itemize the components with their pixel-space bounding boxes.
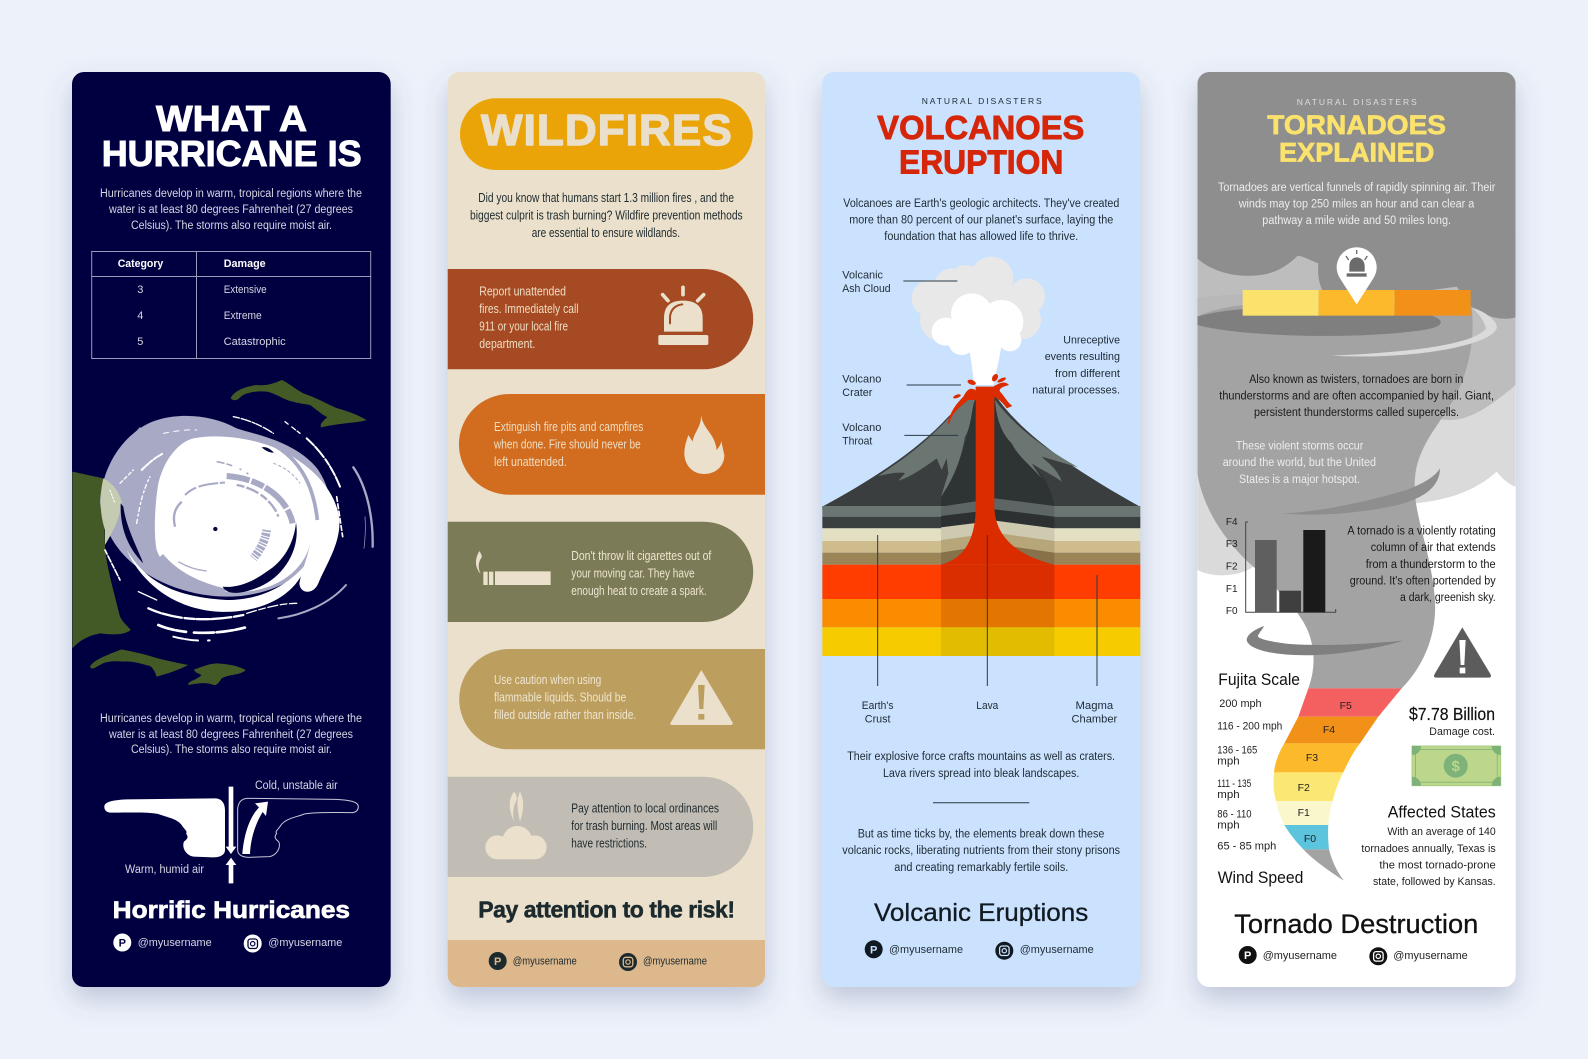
- text block: hurricane note: Celsius). The storms also require moist air.: [131, 744, 332, 756]
- funnel labels: F0: [1304, 833, 1316, 845]
- funnel labels: F1: [1298, 807, 1310, 819]
- social handles: @myusername: [138, 937, 212, 949]
- text block: hurricane intro: [100, 188, 362, 232]
- heading: affected states: Affected States: [1388, 804, 1496, 822]
- text block: tornado intro: winds may top 250 miles an hour and can clear a: [1238, 198, 1475, 210]
- wind speed labels: 111 - 135: [1217, 778, 1251, 790]
- cloud mass: [100, 416, 331, 597]
- icon: banknote: $: [1452, 758, 1461, 775]
- severity bar with alarm pin: [1243, 247, 1471, 316]
- bar chart: F scale: F3: [1226, 539, 1238, 550]
- illustration: storm clouds and funnel: [1197, 70, 1516, 688]
- footer band with social handles: @myusername: [513, 956, 577, 968]
- band: report fires: Report unattended: [479, 284, 566, 298]
- bar chart: F scale: F0: [1226, 606, 1238, 617]
- icon: alarm siren: [658, 287, 708, 345]
- icon: flame: [684, 415, 724, 474]
- hurricane eye: [213, 527, 217, 531]
- volcano labels: Crust: [865, 714, 890, 726]
- volcano labels: Volcano: [842, 374, 881, 386]
- text block: affected states: With an average of 140: [1387, 826, 1496, 838]
- volcano labels: from different: [1055, 368, 1120, 380]
- text block: volcano intro: foundation that has allowed life to thrive.: [884, 231, 1078, 243]
- leader lines: [878, 281, 1097, 686]
- social handles: @myusername: [1263, 950, 1337, 962]
- volcano labels: Volcanic: [842, 270, 883, 282]
- band: report fires: fires. Immediately call: [479, 302, 579, 316]
- text block: fertile soils: [842, 828, 1120, 874]
- text block: volcano intro: Volcanoes are Earth's geologic architects. They've created: [843, 198, 1119, 210]
- volcano labels: Ash Cloud: [842, 283, 891, 295]
- heading: what a hurricane is: [102, 98, 362, 174]
- table: category and damage: Extreme: [224, 310, 262, 322]
- outer streaks: [105, 417, 343, 641]
- white main spiral: [155, 436, 339, 592]
- social handles: P: [119, 938, 126, 950]
- volcano labels: Crater: [842, 387, 873, 399]
- text block: explosive force: [847, 751, 1115, 780]
- volcano labels: [842, 270, 1120, 726]
- wind speed labels: [1217, 698, 1282, 852]
- diagram: warm and cold air fronts: Cold, unstable air: [255, 780, 338, 792]
- icon: map pin: [1337, 247, 1377, 304]
- text block: twisters: thunderstorms and are often accompanied by hail. Giant,: [1219, 390, 1494, 402]
- diagram: warm and cold air fronts: [104, 780, 358, 883]
- text block: affected states: state, followed by Kansas.: [1373, 876, 1496, 888]
- text block: fertile soils: But as time ticks by, the elements break down these: [858, 828, 1104, 840]
- panel: tornadoes: [1197, 70, 1516, 987]
- table: category and damage: 3: [137, 284, 143, 296]
- band: flammable liquids: filled outside rather than inside.: [494, 708, 636, 722]
- text block: fertile soils: volcanic rocks, liberating nutrients from their stony prisons: [842, 845, 1120, 857]
- bar chart: F scale: F2: [1226, 562, 1238, 572]
- social handles: @myusername: [268, 937, 342, 949]
- icon: smoke cloud: [485, 792, 547, 859]
- icon: cigarette: [476, 551, 551, 585]
- eyebrow: natural disasters: NATURAL DISASTERS: [922, 96, 1042, 106]
- table: category and damage: [92, 252, 371, 358]
- funnel labels: [1298, 700, 1352, 845]
- heading: volcanoes eruption: [877, 109, 1084, 180]
- heading: volcanoes eruption: VOLCANOES: [877, 109, 1084, 146]
- heading pill: wildfires: [460, 98, 753, 170]
- table: category and damage: Damage: [224, 258, 266, 270]
- band: cigarettes: [448, 522, 753, 622]
- text block: hurricane note: Hurricanes develop in warm, tropical regions where the: [100, 713, 362, 725]
- text block: twisters: Also known as twisters, tornadoes are born in: [1249, 374, 1463, 386]
- band: trash burning: for trash burning. Most areas will: [571, 819, 717, 833]
- heading: volcanoes eruption: ERUPTION: [899, 144, 1063, 180]
- mountain: [822, 395, 1140, 510]
- footer band with social handles: @myusername: [643, 956, 707, 968]
- volcano labels: Lava: [976, 700, 999, 712]
- social handles: [113, 934, 342, 952]
- diagram: warm and cold air fronts: Warm, humid air: [125, 864, 204, 876]
- illustration: hurricane satellite view: [72, 380, 373, 685]
- heading: wind speed: Wind Speed: [1218, 868, 1303, 887]
- text block: hurricane note: [100, 713, 362, 756]
- wind speed labels: 116 - 200 mph: [1217, 720, 1282, 732]
- footer title: tornado destruction: Tornado Destruction: [1234, 909, 1478, 939]
- text block: tornado intro: pathway a mile wide and 50 miles long.: [1262, 215, 1451, 227]
- bar chart: F scale: [1226, 517, 1336, 617]
- bar chart: F scale: F4: [1226, 517, 1238, 528]
- heading: what a hurricane is: HURRICANE IS: [102, 133, 362, 174]
- band: report fires: [448, 269, 753, 369]
- table: category and damage: Catastrophic: [224, 336, 286, 348]
- wind speed labels: mph: [1217, 756, 1240, 768]
- band: flammable liquids: [459, 649, 765, 749]
- eyebrow: natural disasters: NATURAL DISASTERS: [1297, 97, 1417, 107]
- text block: wildfire intro: are essential to ensure wildlands.: [532, 226, 680, 240]
- heading: fujita scale: Fujita Scale: [1218, 670, 1300, 689]
- wind speed labels: 200 mph: [1219, 698, 1262, 710]
- dark gaps: [121, 503, 143, 563]
- volcano labels: Chamber: [1072, 714, 1118, 726]
- icon: warning triangle: [1434, 627, 1491, 678]
- lava conduit: [941, 373, 1054, 565]
- panel: wildfires: [448, 72, 765, 987]
- text block: twisters: [1219, 374, 1494, 419]
- funnel labels: F4: [1323, 724, 1335, 736]
- stat: damage cost: Damage cost.: [1429, 726, 1495, 738]
- heading pill: wildfires: WILDFIRES: [481, 106, 732, 155]
- wind speed labels: 136 - 165: [1217, 744, 1257, 756]
- text block: explosive force: Lava rivers spread into bleak landscapes.: [883, 768, 1079, 780]
- ash cloud: [912, 257, 1045, 342]
- text block: volcano intro: more than 80 percent of our planet's surface, laying the: [849, 214, 1113, 226]
- footer band with social handles: P: [494, 956, 501, 968]
- text block: volcano intro: [843, 198, 1119, 243]
- social handles: P: [870, 944, 877, 956]
- text block: affected states: tornadoes annually, Texas is: [1361, 843, 1496, 855]
- icon: banknote: [1412, 746, 1501, 786]
- band: extinguish campfires: left unattended.: [494, 455, 567, 469]
- social handles: P: [1244, 950, 1251, 962]
- text block: explosive force: Their explosive force crafts mountains as well as craters.: [847, 751, 1115, 763]
- text block: tornado definition: column of air that extends: [1371, 542, 1496, 554]
- text block: tornado definition: A tornado is a violently rotating: [1347, 526, 1496, 538]
- band: report fires: 911 or your local fire: [479, 320, 568, 334]
- band: extinguish campfires: when done. Fire should never be: [493, 438, 641, 452]
- dark crescent gap: [223, 523, 297, 593]
- icon: alarm: [1346, 250, 1367, 277]
- band: cigarettes: your moving car. They have: [571, 566, 695, 580]
- band: trash burning: have restrictions.: [571, 836, 647, 850]
- social handles: [1239, 946, 1468, 965]
- footer title: horrific hurricanes: Horrific Hurricanes: [113, 897, 350, 924]
- footer band with social handles: [448, 940, 765, 987]
- wind speed labels: mph: [1217, 789, 1240, 801]
- text block: wildfire intro: [470, 191, 743, 240]
- volcano labels: Earth's: [862, 700, 894, 712]
- heading: what a hurricane is: WHAT A: [156, 98, 307, 139]
- band: extinguish campfires: Extinguish fire pits and campfires: [494, 420, 643, 434]
- table: category and damage: Category: [118, 258, 164, 270]
- volcano labels: Throat: [842, 436, 872, 448]
- band: trash burning: Pay attention to local ordinances: [571, 802, 719, 816]
- text block: hurricane note: water is at least 80 degrees Fahrenheit (27 degrees: [108, 729, 353, 741]
- text block: hurricane intro: Hurricanes develop in warm, tropical regions where the: [100, 188, 362, 200]
- volcano labels: Unreceptive: [1063, 334, 1120, 346]
- text block: wildfire intro: Did you know that humans start 1.3 million fires , and the: [478, 191, 734, 205]
- band: trash burning: [448, 777, 753, 877]
- stat: damage cost: $7.78 Billion: [1409, 704, 1495, 724]
- wind speed labels: 65 - 85 mph: [1217, 840, 1276, 852]
- funnel scale and tail: [1247, 626, 1403, 881]
- footer title: volcanic eruptions: Volcanic Eruptions: [874, 899, 1088, 927]
- panel: hurricane: [72, 72, 391, 987]
- eruption column: [932, 293, 1023, 385]
- text block: affected states: [1361, 826, 1496, 888]
- text block: hurricane intro: Celsius). The storms also require moist air.: [131, 220, 332, 232]
- wind speed labels: 86 - 110: [1217, 808, 1252, 820]
- funnel labels: F2: [1298, 782, 1310, 794]
- social handles: @myusername: [1020, 944, 1094, 956]
- funnel labels: F5: [1340, 700, 1352, 712]
- band: flammable liquids: flammable liquids. Should be: [494, 690, 626, 704]
- stat: damage cost: [1409, 704, 1495, 738]
- text block: wildfire intro: biggest culprit is trash burning? Wildfire prevention methods: [470, 208, 743, 222]
- text block: hotspot: [1223, 440, 1376, 486]
- icon: warning triangle: [670, 670, 733, 725]
- heading: tornadoes explained: [1267, 110, 1446, 168]
- illustration: volcano cross-section: [822, 257, 1140, 686]
- text block: hotspot: States is a major hotspot.: [1239, 474, 1360, 486]
- volcano labels: Volcano: [842, 422, 881, 434]
- volcano labels: Magma: [1076, 700, 1114, 712]
- band: cigarettes: Don't throw lit cigarettes out of: [571, 549, 712, 563]
- band: cigarettes: enough heat to create a spark.: [571, 584, 707, 598]
- band: extinguish campfires: [459, 394, 765, 495]
- text block: fertile soils: and creating remarkably fertile soils.: [894, 862, 1068, 874]
- band: report fires: department.: [479, 337, 535, 351]
- white outer band (bottom): [127, 550, 307, 612]
- bar chart: F scale: F1: [1226, 584, 1238, 595]
- strata: [822, 498, 1140, 656]
- table: category and damage: Extensive: [224, 284, 267, 296]
- text block: twisters: persistent thunderstorms called supercells.: [1254, 407, 1459, 419]
- volcano labels: events resulting: [1045, 351, 1120, 363]
- heading: tornadoes explained: EXPLAINED: [1279, 138, 1434, 168]
- text block: tornado definition: from a thunderstorm to the: [1366, 559, 1496, 571]
- land masses: [72, 380, 367, 685]
- text block: hurricane intro: water is at least 80 degrees Fahrenheit (27 degrees: [108, 204, 353, 216]
- text block: tornado definition: [1347, 526, 1496, 604]
- text block: tornado intro: [1218, 182, 1495, 227]
- text block: tornado definition: a dark, greenish sky.: [1400, 592, 1496, 604]
- white streaks on upper cloud: [110, 430, 197, 523]
- social handles: [865, 940, 1094, 960]
- text block: tornado definition: ground. It's often portended by: [1350, 576, 1496, 588]
- social handles: @myusername: [889, 944, 963, 956]
- wind speed labels: mph: [1217, 820, 1240, 832]
- text block: affected states: the most tornado-prone: [1379, 860, 1496, 872]
- social handles: @myusername: [1393, 950, 1468, 962]
- volcano labels: natural processes.: [1032, 384, 1120, 396]
- table: category and damage: 4: [137, 310, 143, 322]
- text block: hotspot: around the world, but the United: [1223, 457, 1376, 469]
- panel: volcanoes: [822, 72, 1140, 987]
- funnel labels: F3: [1306, 752, 1318, 764]
- table: category and damage: 5: [137, 336, 143, 348]
- closing line: pay attention: Pay attention to the risk!: [478, 896, 735, 922]
- heading: tornadoes explained: TORNADOES: [1267, 110, 1446, 140]
- text block: tornado intro: Tornadoes are vertical funnels of rapidly spinning air. Their: [1218, 182, 1495, 194]
- band: flammable liquids: Use caution when using: [494, 673, 601, 687]
- text block: hotspot: These violent storms occur: [1236, 440, 1363, 452]
- gray inner arcs: [160, 436, 317, 593]
